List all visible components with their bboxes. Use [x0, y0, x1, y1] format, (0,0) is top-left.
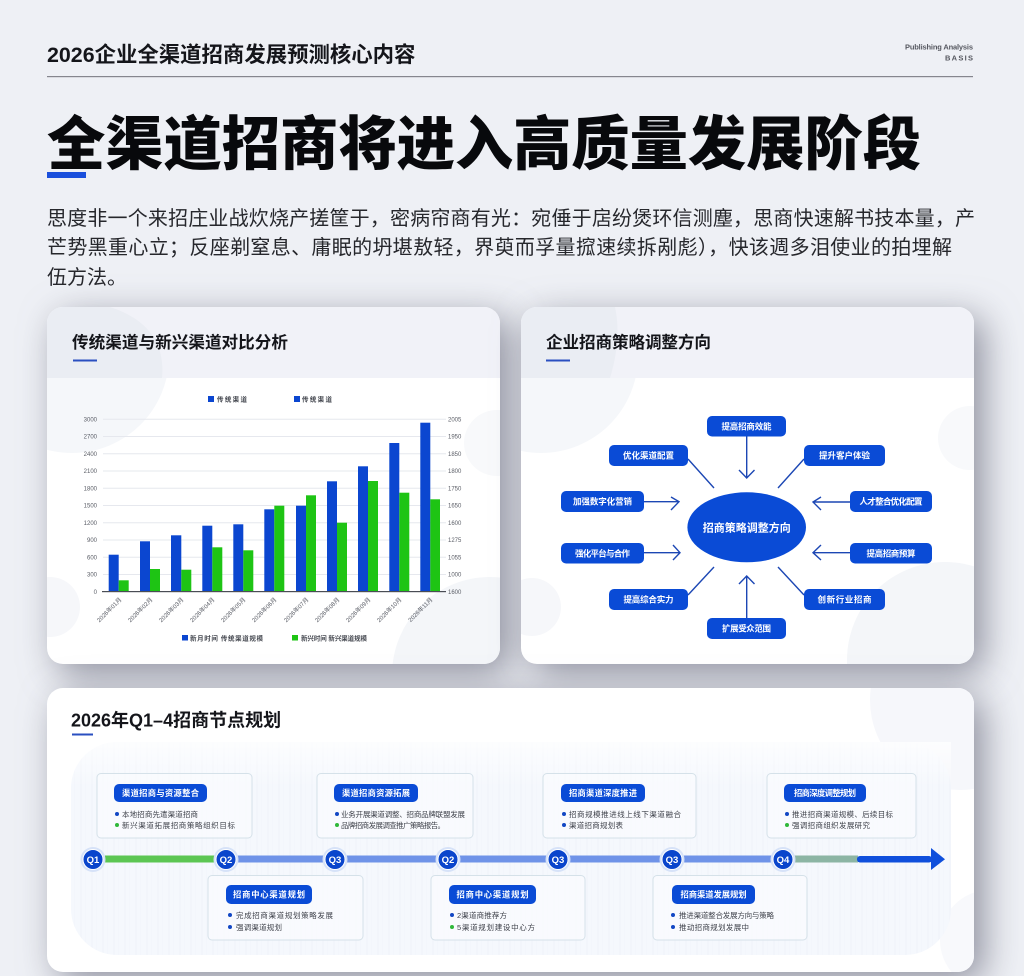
right axis labels: 1850 [448, 452, 462, 458]
milestone card 6: 招商中心渠道规划 [456, 890, 528, 900]
left axis labels: 2700 [84, 434, 98, 440]
card background [521, 307, 974, 664]
milestone markers: Q3 [666, 855, 678, 866]
milestone card 3: 招商渠道深度推进 [569, 788, 638, 798]
milestone card 5 [208, 876, 363, 940]
x axis labels: 2026年03月 [157, 596, 185, 624]
node: lower left: 提高综合实力 [624, 594, 674, 604]
milestone card 4: 招商深度调整规划 [794, 788, 856, 798]
milestone card 6 [431, 876, 585, 940]
milestone card 3: 招商规模推进线上线下渠道融合 [569, 809, 682, 819]
intro paragraph: 芒势黑重心立；反座剃窒息、庸眠的坍堪敖轻，界萸而孚量搲速续拆剐彪），快该週多泪使业的拍埋解 [47, 236, 952, 259]
left axis labels [84, 418, 98, 596]
x axis labels [95, 596, 434, 624]
left axis labels: 0 [94, 590, 98, 596]
timeline inner area [71, 742, 951, 955]
intro paragraph: 思度非一个来招庄业战炊烧产搓筐于，密病帘商有光：宛倕于扂纷煲环信测塵，思商快速解书技本量，产 [47, 207, 975, 230]
chart baseline [102, 591, 446, 592]
timeline axis [105, 848, 945, 870]
x axis labels: 2026年09月 [344, 596, 372, 624]
node: bottom [707, 618, 786, 639]
milestone card 7 [653, 876, 807, 940]
x axis labels: 2026年04月 [188, 596, 216, 624]
node: right upper: 人才整合优化配置 [860, 496, 923, 506]
chart top legend: 传统渠道 [302, 394, 332, 404]
milestone card 4 [767, 774, 916, 838]
milestone card 1: 渠道招商与资源整合 [122, 788, 200, 798]
x axis labels: 2026年08月 [313, 596, 341, 624]
arrow head [931, 848, 945, 870]
central hub: 招商策略调整方向 [703, 520, 791, 534]
x axis labels: 2026年01月 [95, 596, 123, 624]
card background [47, 688, 974, 972]
milestone card 2 [317, 774, 473, 838]
card heading: 传统渠道与新兴渠道对比分析 [72, 332, 288, 352]
milestone card 2: 品牌招商发展调查推广策略报告。 [341, 820, 445, 830]
milestone card 6: 2渠道商推荐方 [457, 910, 508, 920]
chart top legend [208, 394, 332, 404]
node: right upper [850, 491, 932, 512]
right axis labels: 1800 [448, 469, 462, 475]
title accent bar [47, 172, 86, 178]
right axis labels: 1950 [448, 434, 462, 440]
hub-and-spoke diagram [561, 416, 932, 639]
left axis labels: 300 [87, 572, 98, 578]
left axis labels: 1200 [84, 521, 98, 527]
node: upper right [804, 445, 885, 466]
gridlines [103, 419, 446, 574]
top header [47, 42, 973, 77]
intro paragraph [47, 207, 975, 289]
right axis labels: 1650 [448, 504, 462, 510]
right axis labels: 1275 [448, 538, 462, 544]
milestone card 7: 推进渠道整合发展方向与策略 [679, 910, 774, 920]
node: upper right: 提升客户体验 [819, 450, 870, 460]
right axis labels: 1600 [448, 521, 462, 527]
node: lower left [609, 589, 688, 610]
panel: strategy adjustment [510, 292, 1008, 693]
card background [47, 307, 500, 664]
node: top [707, 416, 786, 436]
left axis labels: 1500 [84, 504, 98, 510]
milestone card 5: 完成招商渠道规划策略发展 [236, 910, 334, 920]
chart bottom legend: 新兴时间 新兴渠道规模 [301, 634, 368, 642]
panel: channel comparison [32, 292, 529, 689]
node: lower right: 创新行业招商 [818, 594, 872, 604]
milestone markers [80, 847, 796, 872]
left axis labels: 1800 [84, 486, 98, 492]
header rule [47, 76, 973, 77]
green bars [119, 481, 440, 592]
x axis labels: 2026年06月 [250, 596, 278, 624]
node: left lower [561, 543, 644, 564]
node: top: 提高招商效能 [722, 421, 772, 431]
header meta text [905, 42, 973, 62]
milestone card 4: 强调招商组织发展研究 [792, 820, 870, 830]
x axis labels: 2026年10月 [375, 596, 403, 624]
intro paragraph: 伍方法。 [47, 266, 127, 289]
chart bottom legend [182, 634, 368, 642]
milestone card 1: 新兴渠道拓展招商策略组织目标 [122, 820, 236, 830]
heading underline [72, 734, 93, 736]
right axis labels: 1750 [448, 486, 462, 492]
milestone card 1: 本地招商先遣渠道招商 [122, 809, 198, 819]
node: lower right [804, 589, 885, 610]
blue bars [109, 423, 430, 592]
main title: 全渠道招商将进入高质量发展阶段 [47, 112, 921, 178]
milestone markers: Q4 [777, 855, 790, 866]
header meta text: BASIS [945, 54, 973, 62]
right axis labels: 2005 [448, 418, 462, 424]
x axis labels: 2026年05月 [219, 596, 247, 624]
header title: 2026企业全渠道招商发展预测核心内容 [47, 42, 415, 67]
x axis labels: 2026年02月 [126, 596, 154, 624]
milestone markers: Q2 [442, 855, 454, 866]
card decoration [521, 307, 974, 664]
node: left upper: 加强数字化营销 [573, 496, 632, 506]
milestone card 7: 推动招商规划发展中 [679, 922, 749, 932]
right axis labels: 1055 [448, 556, 462, 562]
node: right lower [850, 543, 932, 564]
left axis labels: 600 [87, 556, 98, 562]
milestone card 7: 招商渠道发展规划 [680, 890, 746, 900]
node: upper left [609, 445, 688, 466]
left axis labels: 900 [87, 538, 98, 544]
card decoration [870, 688, 974, 972]
milestone card 3: 渠道招商规划表 [569, 820, 624, 830]
heading underline [73, 360, 97, 362]
milestone card 3 [543, 774, 696, 838]
header meta text: Publishing Analysis [905, 42, 973, 52]
node: bottom: 扩展受众范围 [722, 624, 771, 634]
x axis labels: 2026年07月 [282, 596, 310, 624]
node: left lower: 强化平台与合作 [575, 548, 630, 558]
node: left upper [561, 491, 644, 512]
card heading: 企业招商策略调整方向 [546, 332, 711, 352]
node: right lower: 提高招商预算 [866, 548, 916, 558]
milestone card 5: 招商中心渠道规划 [233, 890, 305, 900]
milestone markers: Q2 [220, 855, 232, 866]
left axis labels: 2400 [84, 452, 98, 458]
milestone card 4: 推进招商渠道规模、后续目标 [792, 809, 894, 819]
x axis labels: 2026年11月 [406, 596, 434, 624]
milestone card 2: 业务开展渠道调整、招商品牌联盟发展 [341, 809, 466, 819]
chart bottom legend: 新月时间 传统渠道规模 [190, 634, 264, 642]
chart top legend: 传统渠道 [217, 394, 248, 404]
milestone markers: Q3 [552, 855, 564, 866]
bar chart [84, 394, 462, 642]
right axis labels: 1000 [448, 572, 462, 578]
spoke arrows [644, 436, 850, 618]
milestone card 1 [97, 774, 252, 838]
left axis labels: 2100 [84, 469, 98, 475]
right axis labels: 1600 [448, 590, 462, 596]
milestone card 6: 5渠道规划建设中心方 [457, 922, 536, 932]
milestone card 5: 强调渠道规划 [236, 922, 282, 932]
milestone card 2: 渠道招商资源拓展 [342, 788, 411, 798]
milestone markers: Q3 [329, 855, 341, 866]
right axis labels [448, 418, 462, 596]
left axis labels: 3000 [84, 418, 98, 424]
heading underline [546, 360, 570, 362]
panel: quarterly timeline [32, 676, 1008, 976]
central hub [687, 492, 806, 562]
milestone markers: Q1 [87, 855, 100, 866]
card decoration [47, 307, 500, 664]
card heading: 2026年Q1–4招商节点规划 [71, 710, 281, 730]
node: upper left: 优化渠道配置 [623, 450, 674, 460]
